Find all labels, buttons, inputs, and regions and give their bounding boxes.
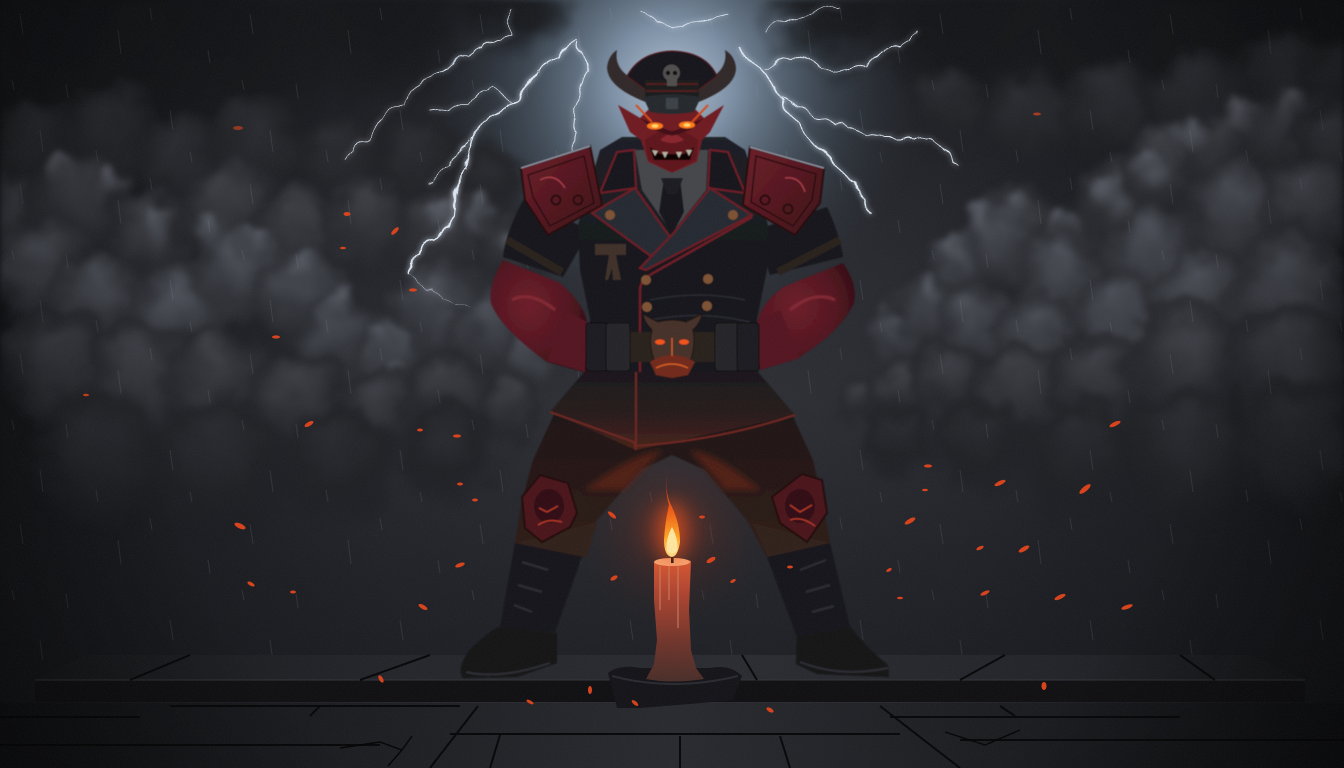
sleeves with straps (503, 200, 843, 277)
oni mask buckle (643, 314, 702, 378)
right pauldron (743, 147, 824, 235)
belt with pouches (586, 323, 759, 371)
knee guards (522, 474, 827, 542)
lightning bolts (340, 4, 955, 305)
cloud band: top (0, 0, 1344, 170)
demon head (618, 105, 724, 173)
platform: stepped stone slab and floor (0, 655, 1344, 768)
officer cap with skull badge (627, 51, 717, 114)
candle back glow (560, 420, 790, 640)
candle base: broken stone dish (608, 667, 742, 708)
shirt and tie (635, 150, 708, 235)
red arms (490, 260, 855, 373)
left horn (607, 50, 650, 103)
candle with wax drips (646, 547, 704, 682)
demon officer figure (461, 50, 889, 678)
right horn (694, 50, 736, 103)
storm clouds (0, 0, 1344, 540)
floating embers (83, 112, 1133, 714)
coat buttons and medal (595, 210, 738, 312)
cloud mass: right (832, 25, 1344, 530)
collar and lapels (592, 150, 752, 270)
boots (461, 543, 889, 678)
dark lower sky (0, 400, 1344, 700)
coat skirt (550, 365, 795, 450)
left pauldron (521, 146, 602, 235)
coat torso (578, 137, 768, 372)
flame (657, 470, 687, 562)
trousers (515, 410, 830, 557)
cloud mass: left (0, 80, 558, 540)
